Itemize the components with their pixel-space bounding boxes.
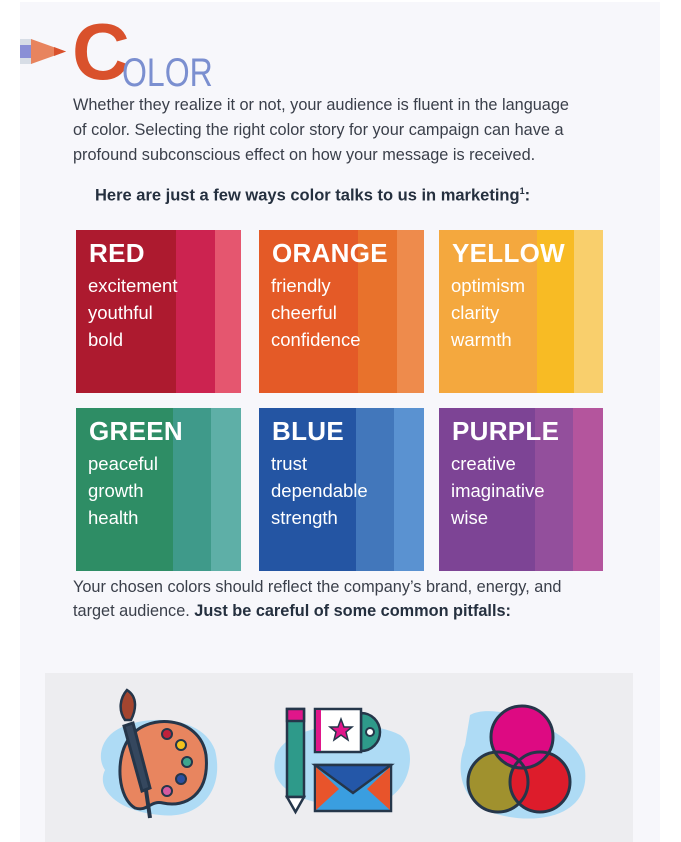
- panel: pitfalls: [45, 673, 633, 842]
- card: yellow: [439, 230, 603, 393]
- closing text: [73, 578, 561, 620]
- card: orange: [259, 230, 424, 393]
- card: yellow: clarity: [451, 302, 499, 323]
- card: yellow: optimism: [451, 275, 525, 296]
- intro text: [73, 96, 569, 164]
- intro text: profound subconscious effect on how your message is received.: [73, 146, 535, 164]
- card: orange: friendly: [271, 275, 331, 296]
- icon: palette: [101, 690, 217, 818]
- card: green: health: [88, 507, 138, 528]
- card: yellow: YELLOW: [452, 238, 565, 268]
- card: blue: BLUE: [272, 416, 344, 446]
- card: purple: PURPLE: [452, 416, 559, 446]
- card: purple: creative: [451, 453, 516, 474]
- card: yellow: warmth: [451, 329, 512, 350]
- card: green: peaceful: [88, 453, 158, 474]
- card: green: growth: [88, 480, 144, 501]
- card: blue: strength: [271, 507, 338, 528]
- card: red: [76, 230, 241, 393]
- title: C: [72, 7, 130, 96]
- icon: pencil: [20, 39, 66, 64]
- intro text: Whether they realize it or not, your audience is fluent in the language: [73, 96, 569, 114]
- title: OLOR: [122, 51, 213, 95]
- card: red: RED: [89, 238, 145, 268]
- title: [72, 7, 213, 96]
- intro text: of color. Selecting the right color story for your campaign can have a: [73, 121, 564, 139]
- card: red: bold: [88, 329, 123, 350]
- card: red: youthful: [88, 302, 153, 323]
- card: green: [76, 408, 241, 571]
- card: red: excitement: [88, 275, 177, 296]
- card: blue: dependable: [271, 480, 368, 501]
- subheading: Here are just a few ways color talks to us in marketing1:: [95, 186, 530, 204]
- closing text: Your chosen colors should reflect the company’s brand, energy, and: [73, 578, 561, 596]
- card: orange: cheerful: [271, 302, 337, 323]
- card: blue: trust: [271, 453, 307, 474]
- card: orange: confidence: [271, 329, 360, 350]
- card: green: GREEN: [89, 416, 183, 446]
- card: purple: imaginative: [451, 480, 545, 501]
- closing text: target audience. Just be careful of some common pitfalls:: [73, 602, 511, 620]
- card: orange: ORANGE: [272, 238, 388, 268]
- card: purple: wise: [451, 507, 488, 528]
- icon: pencil, book, envelope: [274, 709, 410, 812]
- card: purple: [439, 408, 603, 571]
- icon: venn diagram: [461, 706, 585, 819]
- card: blue: [259, 408, 424, 571]
